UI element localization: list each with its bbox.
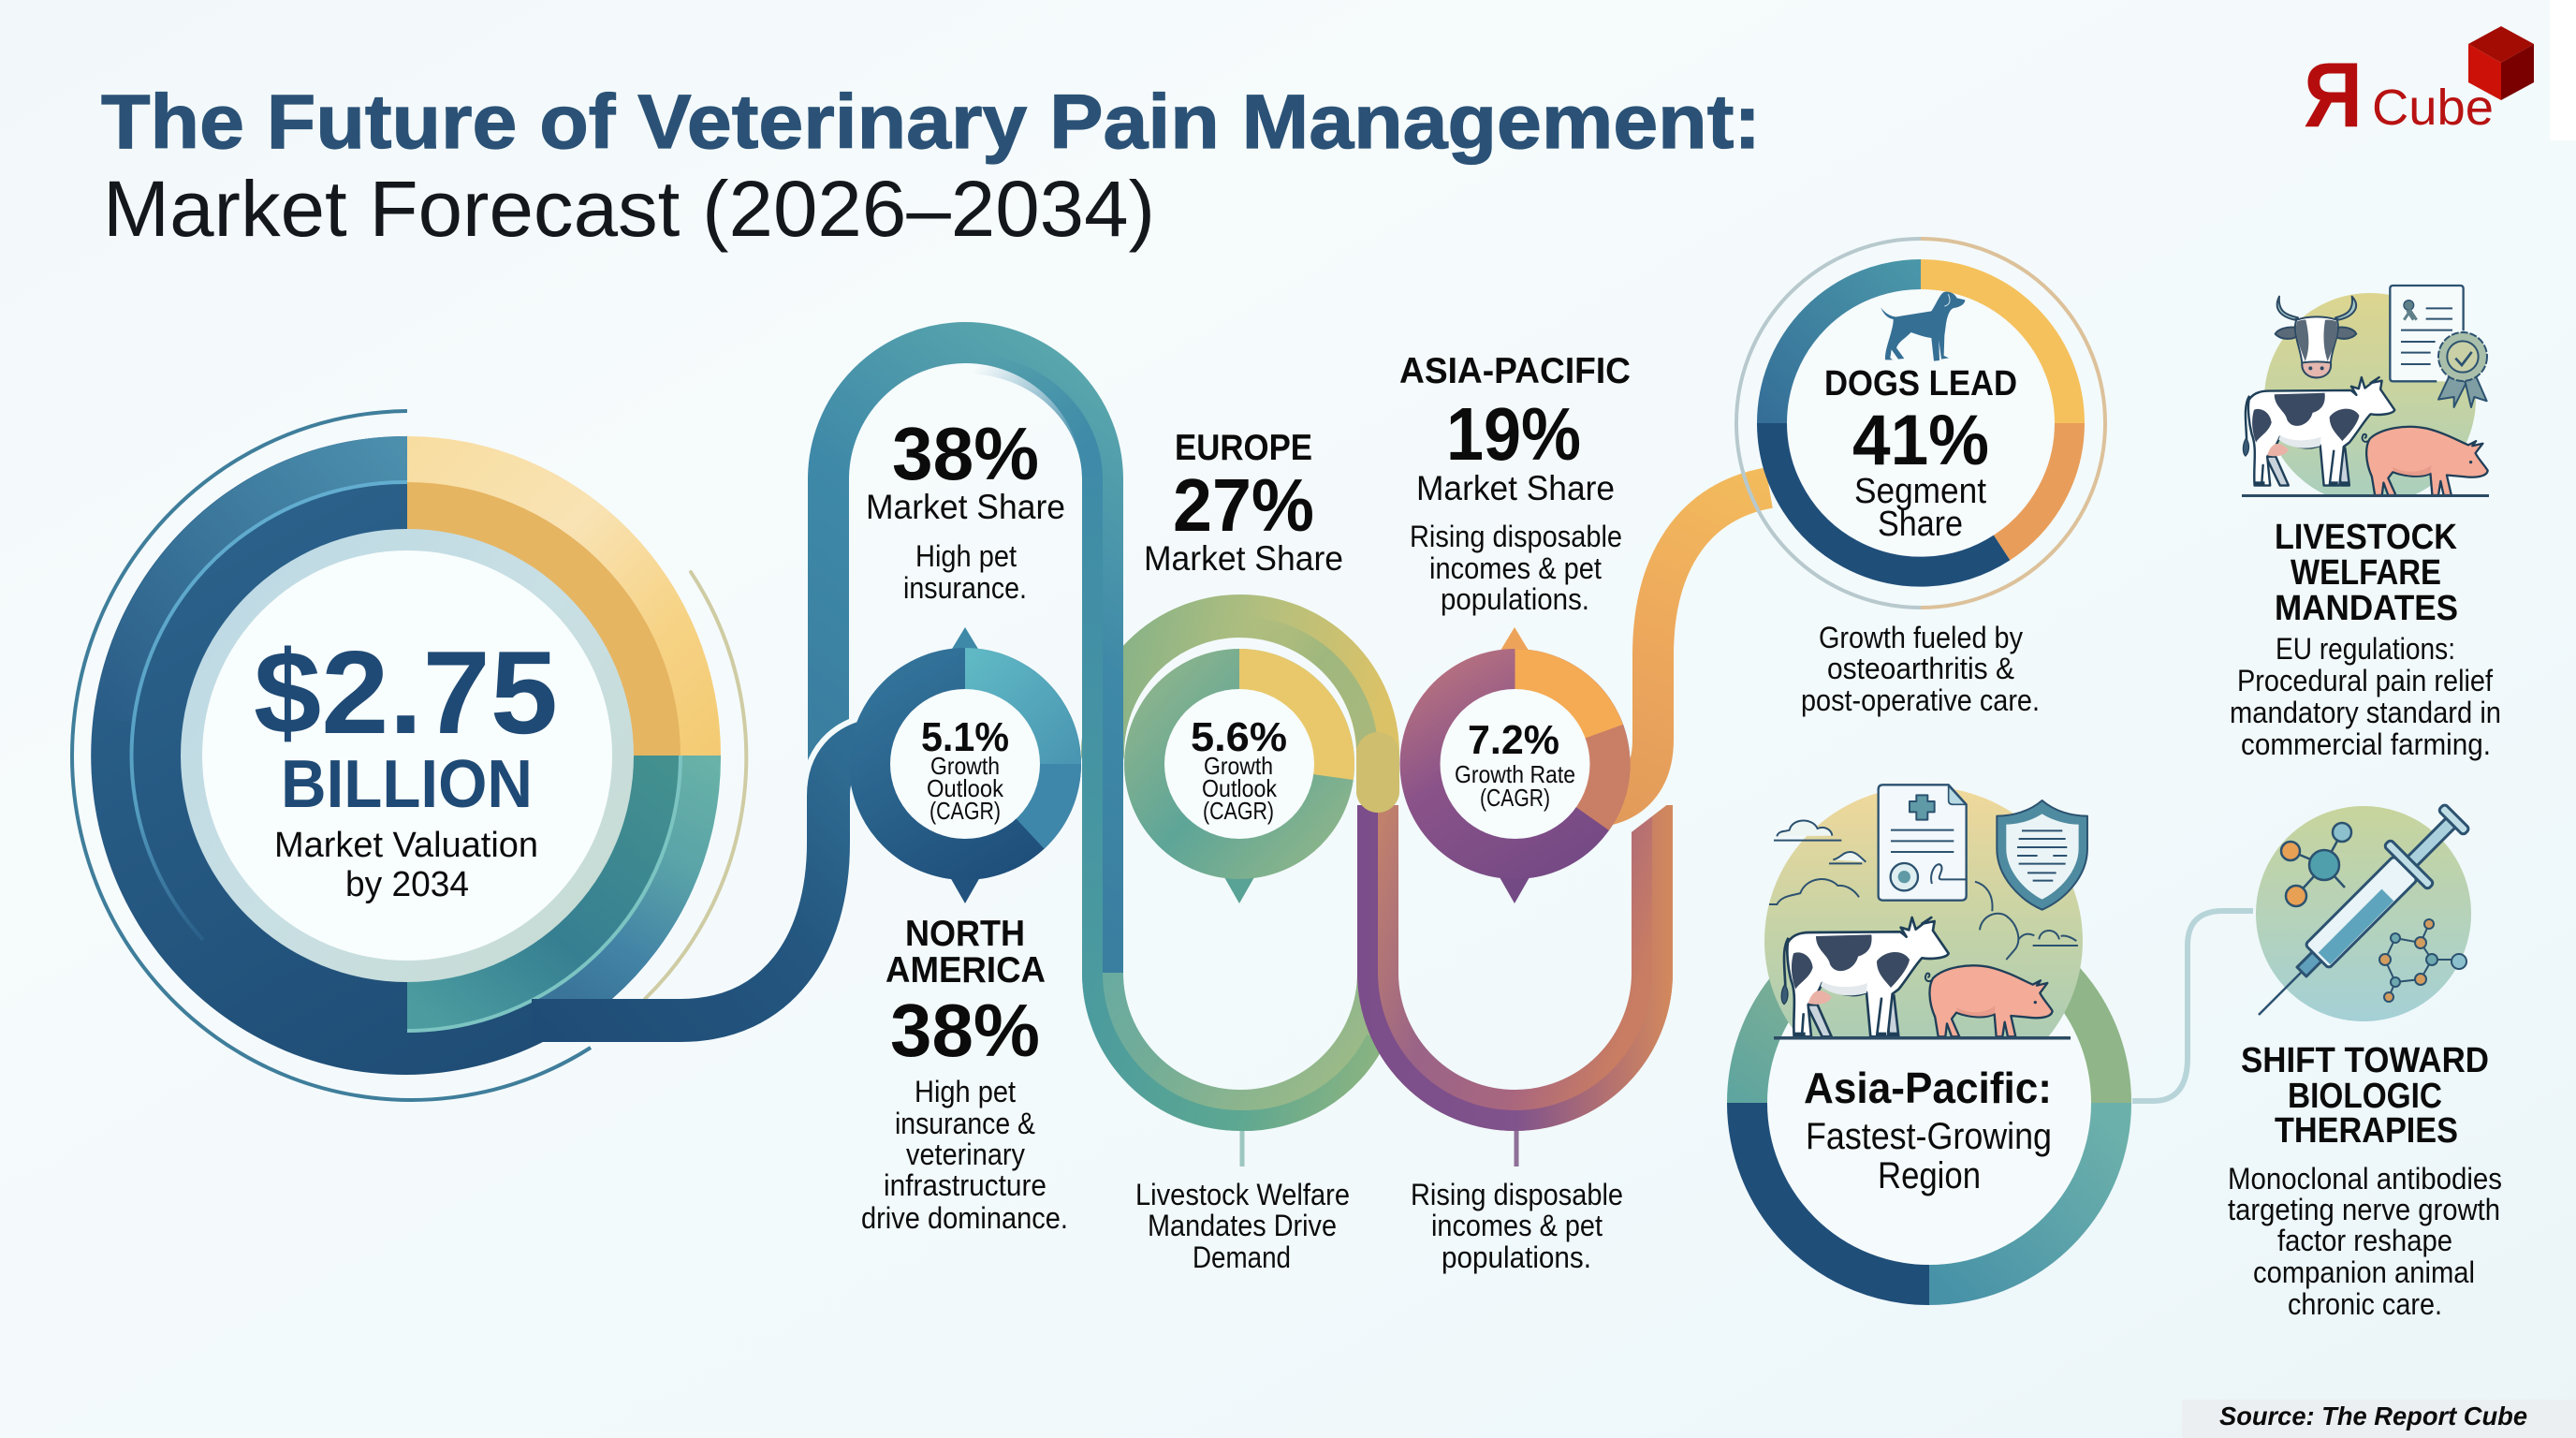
stem xyxy=(1515,1131,1518,1167)
main connector xyxy=(532,740,875,1020)
ring segment teal xyxy=(1772,274,1921,423)
CAGR value: 5.6% xyxy=(1191,714,1287,760)
CAGR value: 7.2% xyxy=(1468,717,1559,763)
bottom pointer xyxy=(1221,871,1258,903)
title line 2: Market Forecast (2026–2034) xyxy=(103,165,1155,253)
light band xyxy=(181,529,634,982)
panel: shift toward biologic therapies xyxy=(2228,795,2502,1321)
note: insurance. xyxy=(903,571,1027,605)
icon: backdrop disc xyxy=(1764,789,2083,1036)
valuation caption 1: Market Valuation xyxy=(274,826,538,865)
region name: EUROPE xyxy=(1175,428,1312,468)
description: Demand xyxy=(1193,1240,1291,1274)
logo: RCube xyxy=(2304,26,2534,146)
panel: livestock welfare mandates xyxy=(2230,286,2501,761)
title xyxy=(101,80,1761,253)
CAGR value: 5.1% xyxy=(921,714,1009,760)
arch blue xyxy=(828,343,1103,973)
purple U outer xyxy=(1368,805,1662,1121)
top left band xyxy=(94,436,407,721)
CAGR label: Outlook xyxy=(1202,774,1278,802)
heading xyxy=(2241,1041,2489,1151)
valuation value: $2.75 xyxy=(254,626,558,758)
ring segment teal xyxy=(1929,1103,2112,1284)
description: Procedural pain relief xyxy=(2237,664,2493,697)
title line 1: The Future of Veterinary Pain Management: xyxy=(101,80,1761,165)
icon: hills right xyxy=(1980,914,2078,960)
dark ring sector xyxy=(91,436,543,1075)
main valuation donut xyxy=(72,411,746,1100)
CAGR donut xyxy=(1124,649,1354,879)
icon: pig xyxy=(1925,965,2053,1036)
icon: rosette xyxy=(2438,332,2487,407)
description: incomes & pet xyxy=(1431,1209,1603,1242)
icon: syringe xyxy=(2237,795,2479,1036)
icon: backdrop disc xyxy=(2264,293,2476,505)
region description: drive dominance. xyxy=(861,1201,1068,1235)
share label: Market Share xyxy=(866,488,1065,526)
logo: RCube: Я xyxy=(2304,43,2363,146)
panel: Europe xyxy=(1124,428,1378,1274)
description: Rising disposable xyxy=(1411,1178,1623,1211)
share label: Market Share xyxy=(1416,469,1615,507)
heading: WELFARE xyxy=(2291,553,2441,593)
description: Growth fueled by xyxy=(1819,621,2023,654)
description: factor reshape xyxy=(2277,1224,2452,1257)
ring segment navy xyxy=(1747,1103,1929,1284)
heading xyxy=(2275,518,2458,628)
panel: Asia-Pacific fastest growing xyxy=(1747,785,2112,1284)
icon: backdrop disc xyxy=(2256,806,2471,1021)
region description: veterinary xyxy=(906,1137,1025,1171)
description: populations. xyxy=(1442,1240,1591,1274)
arch inner shade strip xyxy=(1082,477,1103,974)
label: Share xyxy=(1878,505,1963,544)
subheading xyxy=(1806,1116,2052,1196)
heading: Asia-Pacific: xyxy=(1804,1064,2052,1112)
region share: 19% xyxy=(1446,392,1581,476)
valuation unit: BILLION xyxy=(281,747,533,822)
CAGR label: Growth xyxy=(1204,752,1273,780)
description: targeting nerve growth xyxy=(2228,1193,2500,1226)
bottom pointer xyxy=(946,871,984,903)
note xyxy=(1410,520,1622,616)
description: Livestock Welfare xyxy=(1135,1178,1350,1211)
valuation caption 2: by 2034 xyxy=(345,865,469,904)
ring segment navy xyxy=(1772,423,2002,572)
orange ribbon xyxy=(1591,488,1769,807)
yellow inner sector xyxy=(407,482,681,756)
note: Rising disposable xyxy=(1410,520,1622,553)
region description: insurance & xyxy=(895,1107,1035,1140)
CAGR donut xyxy=(1400,649,1631,879)
note: High pet xyxy=(915,539,1017,573)
description xyxy=(1135,1178,1350,1274)
thin ring left xyxy=(1736,239,1921,608)
description: Monoclonal antibodies xyxy=(2228,1162,2502,1196)
heading: BIOLOGIC xyxy=(2288,1077,2442,1116)
thin right arc xyxy=(645,572,746,999)
CAGR label: (CAGR) xyxy=(929,797,1001,825)
thin ring right xyxy=(1921,239,2105,608)
connector: region to biologics xyxy=(2132,911,2253,1101)
icon: molecule 1 xyxy=(2281,823,2351,906)
highlight arc right xyxy=(407,756,681,1031)
CAGR label: (CAGR) xyxy=(1203,797,1274,825)
region name xyxy=(886,914,1046,990)
icon: cow xyxy=(1781,917,1949,1036)
icon: molecule 2 xyxy=(2379,919,2466,1002)
heading: LIVESTOCK xyxy=(2275,518,2457,557)
description: chronic care. xyxy=(2288,1287,2442,1321)
source credit xyxy=(2182,1400,2576,1438)
panel: Asia-Pacific share xyxy=(1399,351,1631,1274)
icon: certificate xyxy=(2390,286,2464,381)
region description xyxy=(861,1075,1068,1235)
europe arch end xyxy=(1356,754,1399,791)
description xyxy=(1801,621,2040,717)
ring segment green xyxy=(1986,930,2112,1103)
description xyxy=(2228,1162,2502,1321)
panel: dogs lead xyxy=(1736,239,2105,717)
share value top: 38% xyxy=(892,412,1039,495)
heading: DOGS LEAD xyxy=(1824,364,2017,404)
ground line xyxy=(1774,1036,2071,1039)
CAGR label: Growth Rate xyxy=(1455,760,1575,788)
CAGR label xyxy=(1455,760,1575,812)
white centre xyxy=(202,550,612,961)
CAGR donut xyxy=(849,648,1081,880)
bottom pointer xyxy=(1496,871,1533,903)
description: osteoarthritis & xyxy=(1827,652,2014,685)
description: commercial farming. xyxy=(2241,727,2491,761)
stem xyxy=(1239,1131,1245,1167)
region name: ASIA-PACIFIC xyxy=(1399,351,1631,391)
CAGR label xyxy=(927,752,1004,825)
region share: 27% xyxy=(1173,463,1314,547)
ring segment yellow xyxy=(1921,274,2070,423)
description: companion animal xyxy=(2253,1255,2475,1289)
heading: MANDATES xyxy=(2275,589,2458,628)
CAGR label xyxy=(1202,752,1278,825)
icon: pig xyxy=(2363,427,2488,495)
panel: North America xyxy=(849,412,1081,1235)
ring segment teal green xyxy=(1747,930,1872,1103)
ring interior xyxy=(1787,289,2055,557)
description xyxy=(2230,632,2501,761)
description: post-operative care. xyxy=(1801,683,2040,717)
region description: infrastructure xyxy=(884,1168,1046,1202)
ring segment orange xyxy=(2002,423,2070,548)
teal inner sector xyxy=(407,756,681,1031)
region name: AMERICA xyxy=(886,950,1046,990)
teal outer sector xyxy=(407,756,721,999)
heading: THERAPIES xyxy=(2275,1111,2458,1151)
top pointer xyxy=(949,627,981,653)
region description: High pet xyxy=(915,1075,1016,1108)
CAGR label: Outlook xyxy=(927,774,1004,802)
ring interior xyxy=(1765,939,2093,1267)
ground line xyxy=(2242,494,2489,497)
region name: NORTH xyxy=(905,914,1025,954)
icon: medical document xyxy=(1879,785,1967,901)
note: populations. xyxy=(1441,582,1589,616)
subheading: Region xyxy=(1878,1155,1981,1196)
green U outer xyxy=(1092,973,1376,1121)
thin outer arc xyxy=(72,411,591,1100)
description: EU regulations: xyxy=(2276,632,2455,666)
main connector gap xyxy=(828,740,875,796)
description: mandatory standard in xyxy=(2230,696,2501,729)
orange gap xyxy=(1591,488,1769,807)
icon: clouds and hills xyxy=(1769,820,1993,911)
purple end cut xyxy=(1624,768,1685,838)
share label: Market Share xyxy=(1144,539,1343,578)
label: Segment xyxy=(1854,472,1986,511)
source credit: Source: The Report Cube xyxy=(2219,1401,2527,1431)
subheading: Fastest-Growing xyxy=(1806,1116,2052,1157)
label xyxy=(1854,472,1986,544)
yellow outer sector xyxy=(407,436,721,756)
CAGR label: (CAGR) xyxy=(1480,784,1550,812)
note: incomes & pet xyxy=(1429,551,1602,585)
white logo patch xyxy=(2550,0,2576,140)
region share: 38% xyxy=(890,989,1040,1072)
logo: RCube: Cube xyxy=(2372,80,2494,136)
description xyxy=(1411,1178,1623,1274)
highlight arc left xyxy=(132,482,407,940)
icon: cow head xyxy=(2276,297,2356,377)
heading: SHIFT TOWARD xyxy=(2241,1041,2489,1080)
europe arch xyxy=(1103,616,1378,791)
icon: shield xyxy=(1997,800,2087,910)
value: 41% xyxy=(1852,401,1989,480)
icon: cow xyxy=(2243,377,2394,486)
green U xyxy=(1103,973,1378,1110)
europe arch inner band xyxy=(1240,627,1368,791)
description: Mandates Drive xyxy=(1148,1209,1337,1242)
arch inner shade curve xyxy=(965,363,1092,479)
note xyxy=(903,539,1027,605)
purple U xyxy=(1378,805,1652,1110)
icon: dog xyxy=(1881,292,1965,361)
ribbons xyxy=(532,343,1769,1121)
CAGR label: Growth xyxy=(930,752,1000,780)
top pointer xyxy=(1499,627,1530,653)
